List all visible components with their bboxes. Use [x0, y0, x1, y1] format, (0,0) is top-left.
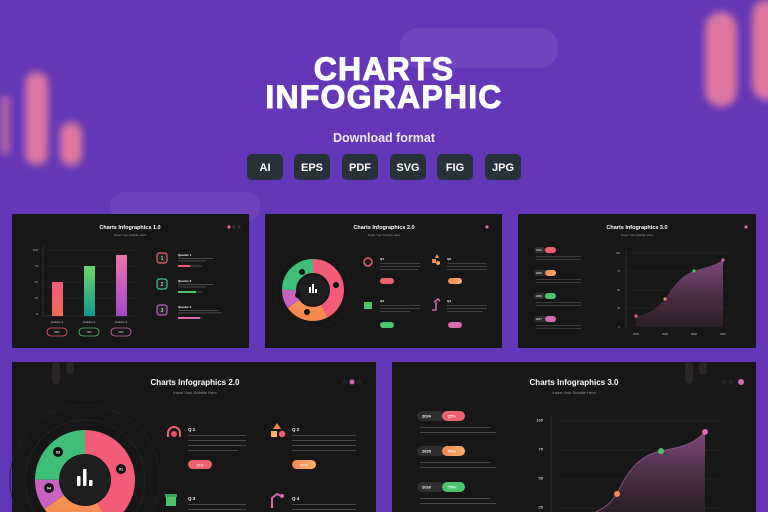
panel: charts infographics 3.0 small: Insert Your Subtitle Here: [621, 233, 654, 237]
subtitle: download format: Download format: [333, 131, 436, 145]
bar chart: 75%: [86, 330, 92, 334]
q1 item: Q 1: [188, 427, 196, 432]
year list small: 2024: [536, 248, 542, 252]
area chart large: 75: [539, 446, 544, 452]
background decorations: [0, 0, 768, 222]
area chart small: 75: [617, 269, 621, 273]
bar chart: Quarter 3: [115, 320, 128, 324]
quarter list: 1: [161, 256, 164, 262]
panel: charts infographics 2.0 small: Insert Your Subtitle Here: [368, 233, 401, 237]
year list: 2026: [422, 484, 432, 490]
q2 item: 50%: [300, 464, 308, 468]
panel: charts infographics 3.0 large: Insert Your Subtitle Here: [552, 390, 596, 395]
year list: 50%: [448, 448, 456, 454]
format buttons: JPG: [492, 162, 514, 174]
panel: charts infographics 1.0: [12, 214, 249, 348]
year list small: [534, 247, 581, 329]
area chart large: 25: [539, 504, 544, 510]
q3 item: Q 3: [188, 496, 196, 501]
quarter list: Quarter 2: [178, 279, 192, 283]
q4 item: Q 4: [292, 496, 300, 501]
bar chart: 90%: [118, 330, 124, 334]
panel: charts infographics 2.0 large: [10, 362, 376, 512]
area chart small: 25: [617, 306, 621, 310]
panel: charts infographics 3.0 small: [518, 214, 756, 348]
area chart large: 100: [536, 418, 544, 422]
year list: 25%: [448, 414, 456, 418]
panel: charts infographics 1.0: Insert Your Subtitle Here: [114, 233, 147, 237]
area chart small: 2025: [662, 332, 668, 336]
bar chart: 80%: [54, 330, 60, 334]
area chart small: 50: [617, 288, 621, 292]
bar chart: [33, 246, 137, 336]
q items small: [364, 254, 487, 328]
bar chart: Quarter 1: [51, 320, 64, 324]
year list small: 2025: [536, 271, 542, 275]
year list small: 2026: [536, 294, 542, 298]
q2 item: Q 2: [292, 427, 300, 432]
donut chart large: 01: [119, 466, 124, 472]
year list: 2025: [422, 448, 432, 454]
bar chart: 0: [36, 312, 38, 316]
q1 item: [168, 427, 246, 469]
q items small: Q1: [380, 257, 384, 261]
quarter list: 3: [161, 308, 164, 314]
quarter list: Quarter 1: [178, 253, 192, 257]
year list: [417, 411, 496, 504]
q4 item: [272, 494, 356, 510]
format buttons: EPS: [301, 162, 323, 174]
q items small: Q2: [447, 257, 451, 261]
donut chart large: 03: [56, 450, 61, 454]
quarter list: 2: [161, 282, 164, 288]
area chart small: 0: [619, 325, 621, 329]
donut chart large: [10, 405, 160, 512]
q1 item: 25%: [196, 464, 204, 468]
year list: 75%: [448, 484, 456, 490]
bar chart: Quarter 2: [83, 320, 96, 324]
q2 item: [271, 423, 356, 469]
area chart small: 100: [616, 251, 621, 255]
panel: charts infographics 3.0 large: Charts Infographics 3.0: [530, 378, 619, 387]
format buttons: AI: [260, 162, 270, 174]
format buttons: PDF: [349, 162, 371, 174]
title: [267, 56, 502, 109]
area chart large: 50: [539, 476, 544, 480]
format buttons: [247, 154, 521, 180]
area chart small: 2027: [720, 332, 726, 336]
bar chart: 50: [35, 280, 38, 284]
area chart small: [616, 250, 730, 336]
panel: charts infographics 2.0 large: Charts Infographics 2.0: [151, 378, 240, 387]
q3 item: [165, 494, 246, 510]
bar chart: 100: [33, 248, 38, 252]
donut chart large: 04: [47, 486, 52, 490]
panel: charts infographics 1.0: Charts Infographics 1.0: [99, 225, 161, 231]
quarter list: [157, 253, 222, 319]
area chart small: 2026: [691, 332, 697, 336]
area chart small: 2024: [633, 332, 639, 336]
panel: charts infographics 3.0 large: [392, 362, 756, 512]
format buttons: FIG: [446, 162, 464, 174]
bar chart: 75: [35, 264, 38, 268]
bar chart: 25: [35, 296, 38, 300]
panel: charts infographics 2.0 large: Insert Your Subtitle Here: [173, 390, 217, 395]
panel: charts infographics 2.0 small: [265, 214, 502, 348]
area chart large: [536, 415, 720, 512]
year list: 2024: [422, 414, 432, 418]
title: CHARTS: [314, 51, 454, 87]
year list small: 2027: [536, 317, 542, 321]
q items small: Q4: [447, 299, 451, 303]
donut chart small: [275, 252, 351, 328]
title: INFOGRAPHIC: [265, 79, 503, 115]
panel: charts infographics 3.0 small: Charts Infographics 3.0: [606, 225, 668, 231]
format buttons: SVG: [396, 162, 420, 174]
q items small: Q3: [380, 299, 384, 303]
panel: charts infographics 2.0 small: Charts Infographics 2.0: [353, 225, 415, 231]
quarter list: Quarter 3: [178, 305, 192, 309]
